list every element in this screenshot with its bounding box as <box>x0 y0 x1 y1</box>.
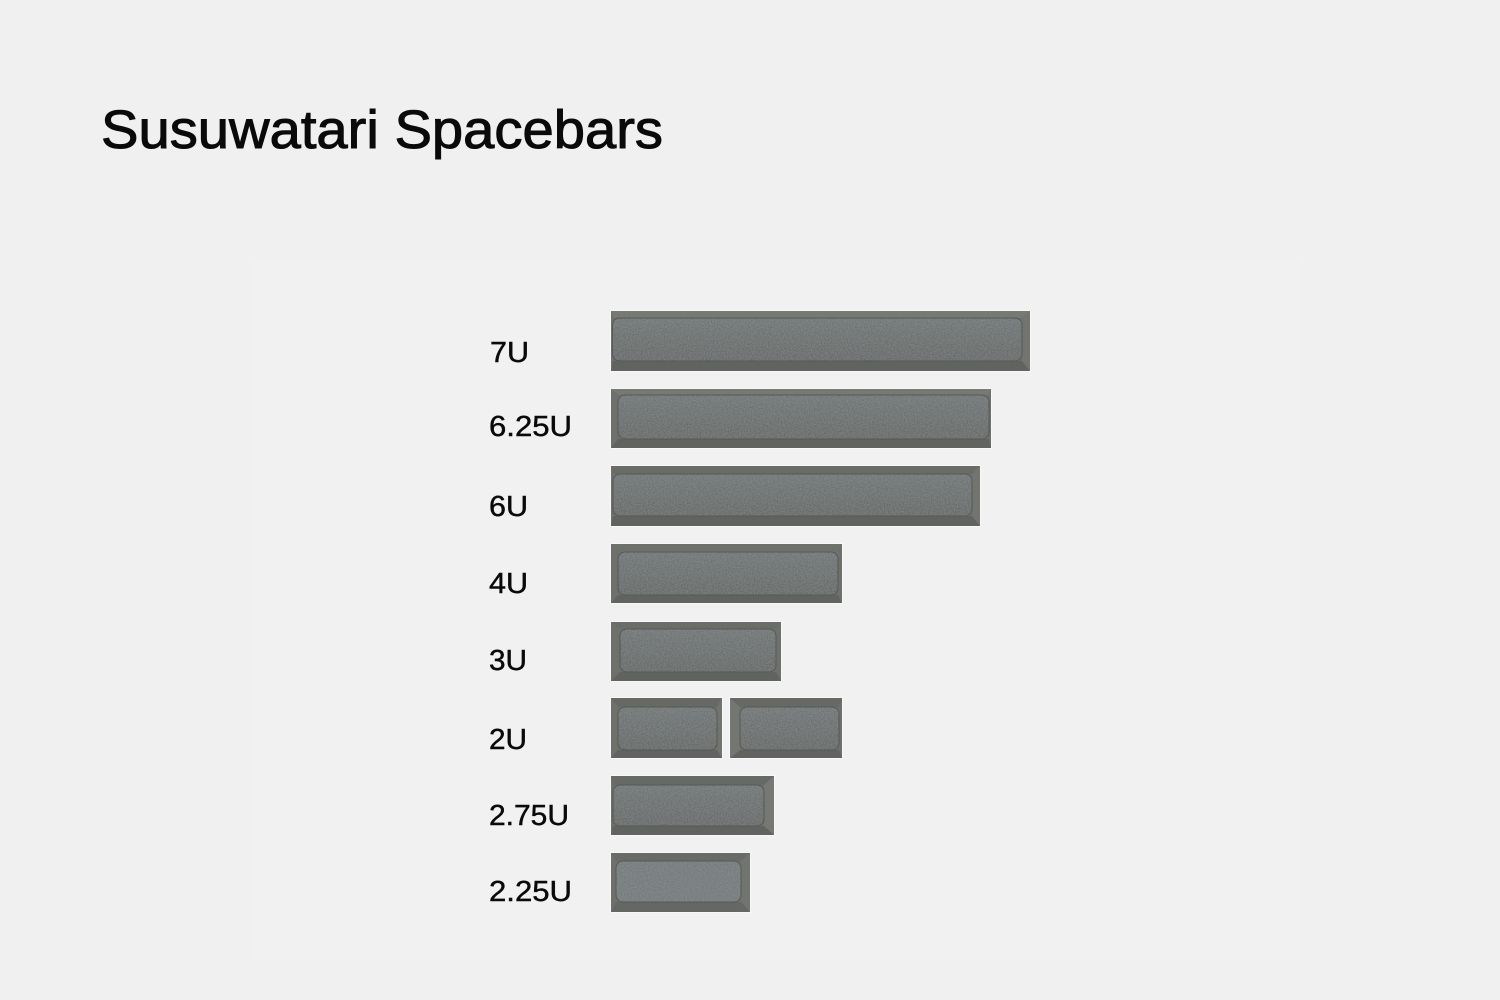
size label: 4U: 4U <box>489 568 528 600</box>
size label: 3U: 3U <box>489 645 527 677</box>
keycap: 6.25U <box>610 388 992 448</box>
size label: 2.75U: 2.75U <box>489 800 569 832</box>
size label: 6.25U: 6.25U <box>489 411 572 443</box>
size label: 7U: 7U <box>490 337 529 369</box>
keycap: 2U left <box>610 698 722 758</box>
keycap: 4U <box>610 544 842 604</box>
keycap: 6U <box>610 466 980 526</box>
size label: 6U: 6U <box>489 491 528 523</box>
keycap: 2.25U <box>610 852 750 912</box>
title: Susuwatari Spacebars <box>101 100 663 160</box>
keycap: 3U <box>610 622 782 682</box>
size label: 2.25U: 2.25U <box>489 876 572 908</box>
keycap: 2U right <box>730 698 842 758</box>
keycap: 7U <box>610 310 1030 372</box>
keycap: 2.75U <box>610 776 774 836</box>
size label: 2U: 2U <box>489 724 527 756</box>
